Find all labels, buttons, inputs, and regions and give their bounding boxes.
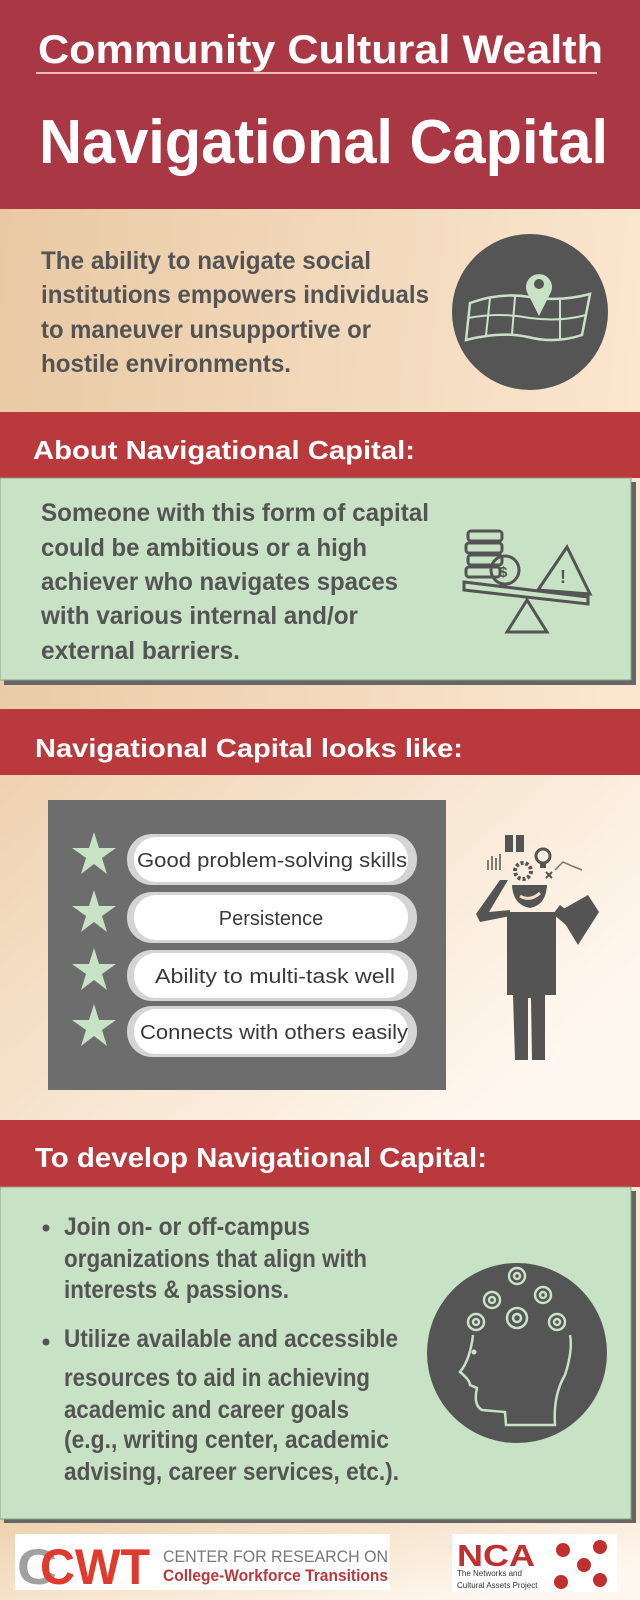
logo: CCWT: C <box>17 1539 57 1595</box>
bullet 2: Utilize available and accessible <box>64 1325 398 1353</box>
bullet 1: interests & passions. <box>64 1276 289 1304</box>
bullet 2: advising, career services, etc.). <box>64 1458 399 1486</box>
bullet 2: academic and career goals <box>64 1396 349 1424</box>
logo: CCWT: College-Workforce Transitions <box>163 1566 388 1585</box>
definition text: institutions empowers individuals <box>41 281 429 309</box>
panel: develop <box>0 1187 636 1523</box>
bullet 1 <box>42 1213 367 1304</box>
definition text <box>41 247 429 378</box>
bullet 1: Join on- or off-campus <box>64 1213 310 1241</box>
section header: looks like: Navigational Capital looks like: <box>35 733 463 763</box>
bullet 1: organizations that align with <box>64 1245 367 1273</box>
about text: could be ambitious or a high <box>41 534 367 562</box>
icon: balance scale <box>464 531 590 632</box>
header banner <box>0 0 640 209</box>
logo: NCA: Cultural Assets Project <box>457 1581 538 1590</box>
panel: about <box>0 478 636 685</box>
trait: Good problem-solving skills <box>72 832 417 885</box>
trait: Good problem-solving skills: Good problem-solving skills <box>137 850 407 872</box>
definition text: to maneuver unsupportive or <box>41 316 371 344</box>
icon: thinking person <box>476 835 599 1060</box>
section header: develop: To develop Navigational Capital: <box>35 1142 487 1173</box>
trait: Persistence <box>72 890 417 943</box>
icon: map with pin <box>452 234 608 390</box>
bullet 2: (e.g., writing center, academic <box>64 1426 389 1454</box>
section header: About: About Navigational Capital: <box>33 435 415 465</box>
trait: Persistence: Persistence <box>219 908 323 930</box>
about text: achiever who navigates spaces <box>41 568 398 596</box>
title: Navigational Capital: Navigational Capital <box>39 108 608 177</box>
definition text: hostile environments. <box>41 350 291 378</box>
panel: about: $ <box>499 564 508 581</box>
section header: About <box>0 412 640 478</box>
panel: traits list <box>48 800 446 1090</box>
about text: Someone with this form of capital <box>41 499 429 527</box>
bullet 2 <box>42 1325 399 1486</box>
logo: CCWT: CWT <box>40 1539 150 1595</box>
logo: CCWT <box>15 1534 390 1595</box>
logo: NCA: NCA <box>457 1538 535 1573</box>
trait: Ability to multi-task well <box>72 948 417 1001</box>
about text <box>40 499 429 665</box>
trait: Connects with others easily: Connects with others easily <box>140 1022 408 1044</box>
title: Community Cultural Wealth: Community Cultural Wealth <box>38 28 603 72</box>
section header: develop <box>0 1120 640 1187</box>
logo: NCA: The Networks and <box>457 1569 522 1578</box>
section header: looks like <box>0 709 640 775</box>
trait: Ability to multi-task well: Ability to multi-task well <box>155 966 395 988</box>
about text: external barriers. <box>41 637 240 665</box>
bullet 2: resources to aid in achieving <box>64 1364 370 1392</box>
logo: CCWT: CENTER FOR RESEARCH ON <box>163 1547 388 1566</box>
icon: head with swirls <box>427 1263 607 1443</box>
panel: about: ! <box>560 567 566 587</box>
logo: NCA <box>452 1534 617 1592</box>
trait: Connects with others easily <box>72 1004 417 1057</box>
about text: with various internal and/or <box>40 602 358 630</box>
definition text: The ability to navigate social <box>41 247 371 275</box>
